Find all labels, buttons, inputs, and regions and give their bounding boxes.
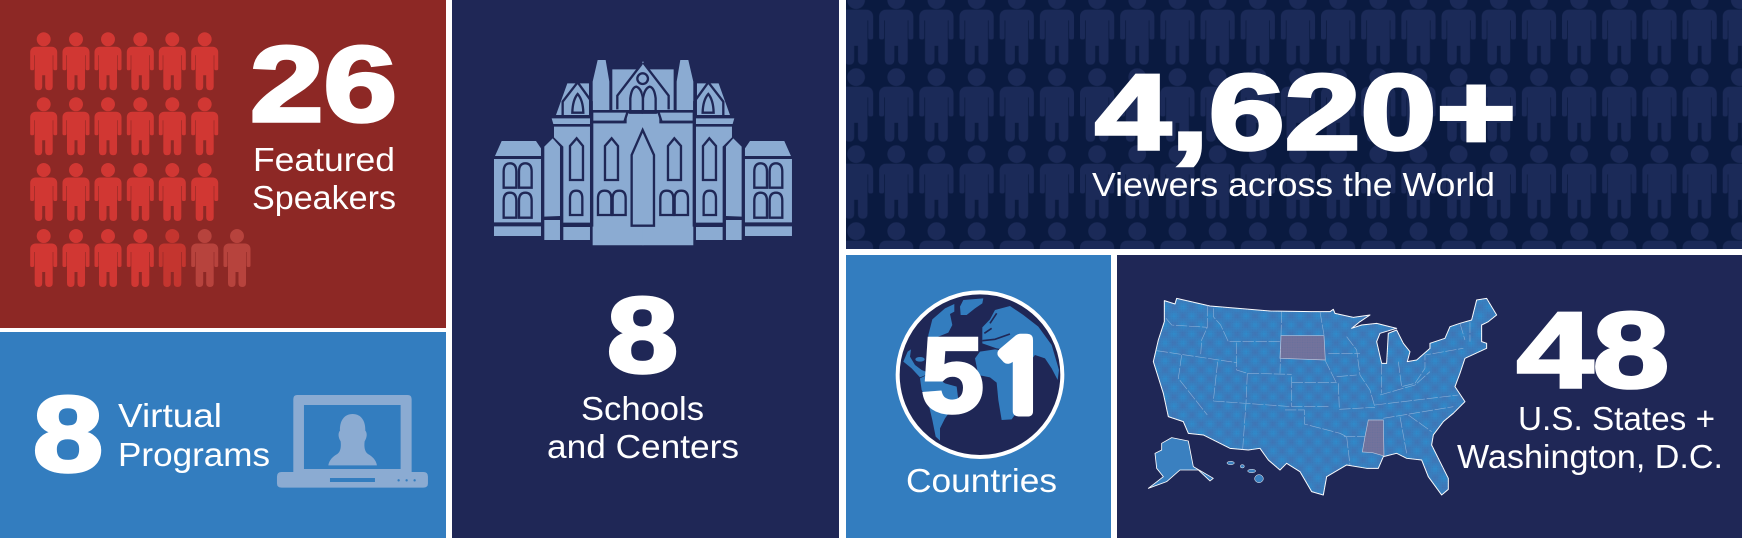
panel: countries [846, 255, 1111, 538]
label: U.S. States + Washington, D.C.: U.S. States + [1518, 400, 1715, 437]
panel: schools and centers [452, 0, 839, 538]
state: South Dakota [1280, 336, 1325, 360]
number: 26: 26 [250, 24, 397, 144]
pictogram: rows of speakers [30, 32, 251, 287]
icon: laptop with person [277, 395, 428, 488]
state: Mississippi [1362, 420, 1384, 456]
label: Featured Speakers [252, 141, 396, 216]
label: U.S. States + Washington, D.C.: Washington, D.C. [1457, 438, 1723, 475]
Hawaii [1227, 461, 1263, 483]
Alaska [1148, 438, 1213, 488]
number: 8: 8 [607, 275, 678, 395]
label: Schools and Centers: Schools [581, 390, 704, 427]
panel: U.S. states [1117, 255, 1742, 538]
icon: gothic building [494, 60, 792, 245]
label: Virtual Programs: Virtual [118, 397, 222, 434]
number: 51: 1 [988, 330, 1053, 427]
label: Virtual Programs: Programs [118, 436, 270, 473]
label: Featured Speakers: Speakers [252, 179, 396, 216]
label: Schools and Centers: and Centers [547, 428, 739, 465]
map: United States [1148, 298, 1497, 495]
number: 48: 48 [1517, 290, 1669, 410]
pattern: crowd of people [846, 0, 1742, 249]
panel: virtual programs [0, 332, 446, 538]
label: Countries: Countries [906, 462, 1057, 499]
number: 8: 8 [33, 374, 103, 494]
panel: viewers across the world [846, 0, 1742, 249]
label: U.S. States + Washington, D.C. [1457, 400, 1723, 475]
label: Viewers across the World: Viewers across the World [1092, 166, 1495, 203]
label: Virtual Programs [118, 397, 270, 473]
panel: featured speakers [0, 0, 446, 328]
icon: globe [898, 292, 1062, 457]
number: 51: 5 [921, 315, 984, 435]
state borders [1157, 305, 1470, 465]
label: Featured Speakers: Featured [253, 141, 395, 178]
label: Schools and Centers [547, 390, 739, 465]
number: 4,620+: 4,620+ [1095, 52, 1516, 172]
